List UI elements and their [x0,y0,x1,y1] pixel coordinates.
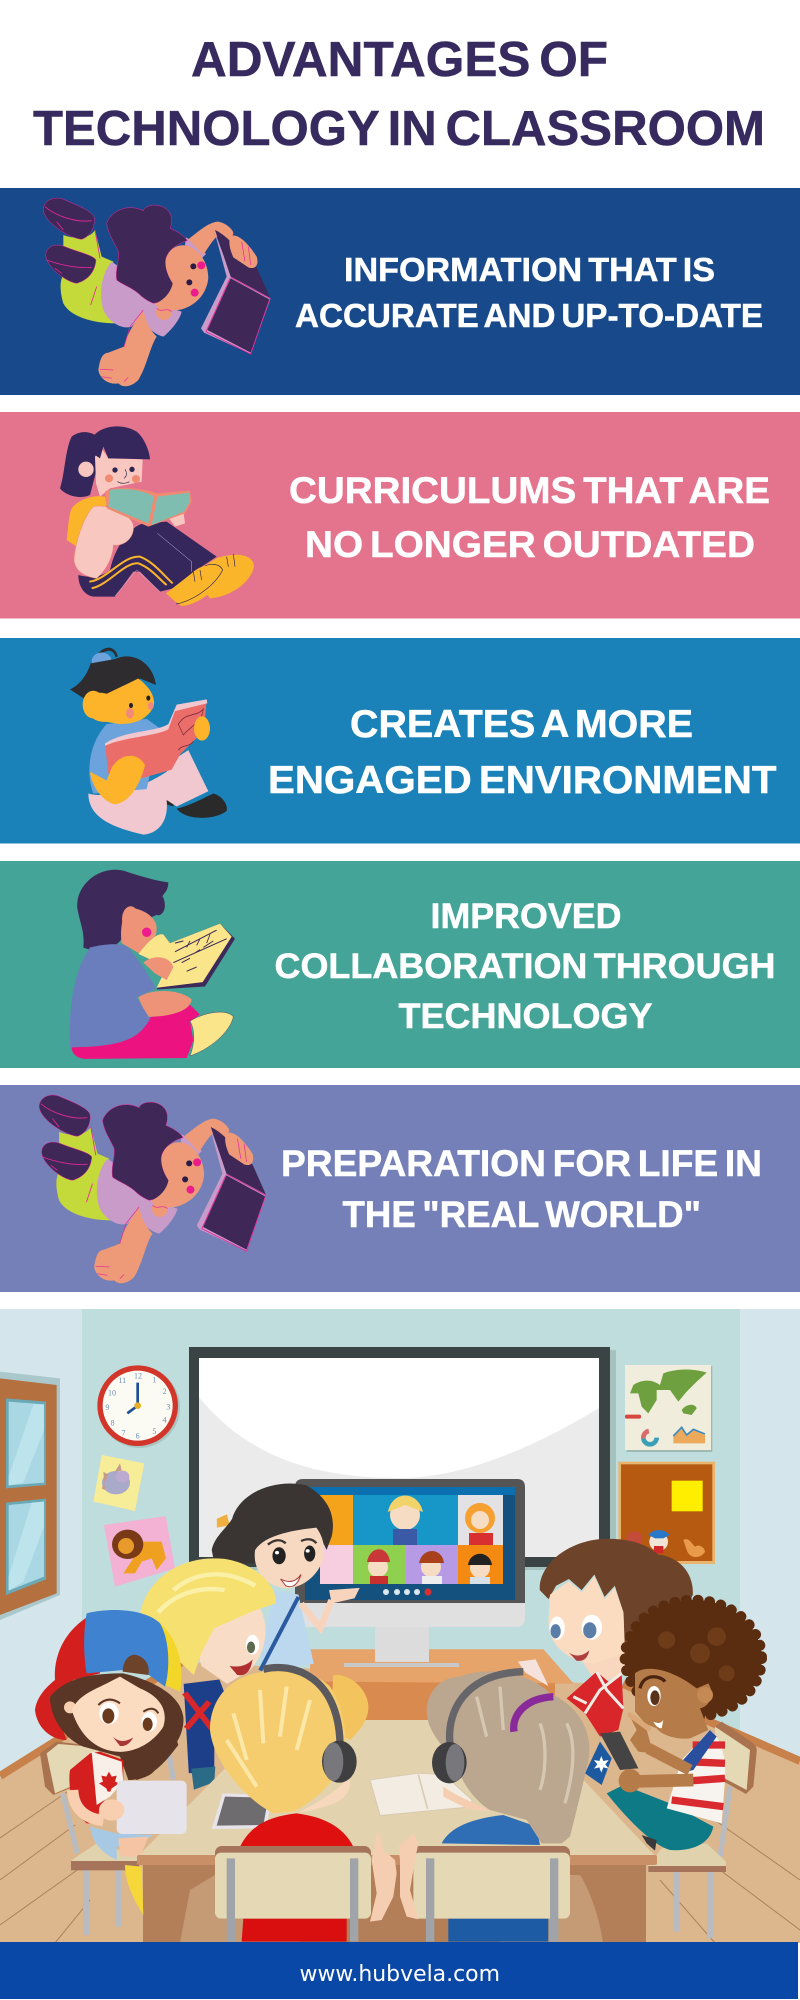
panel: curriculums [0,412,800,618]
clock: 11 [118,1376,126,1385]
tablet on table [212,1793,272,1829]
clock: 3 [166,1402,170,1411]
text: real world: PREPARATION FOR LIFE IN [281,1143,762,1184]
text: accurate information: ACCURATE AND UP-TO-DATE [295,298,763,335]
footer url: www.hubvela.com [300,1962,500,1987]
icon: child reading yellow book [70,870,235,1059]
clock: 9 [105,1403,109,1412]
clock: 12 [134,1372,142,1381]
window [0,1372,60,1620]
icon: child reading red book [70,649,227,835]
gray-haired child from behind [398,1671,589,1942]
girl with cap [35,1610,187,1915]
text: collaboration [274,896,776,1036]
poster: world map [625,1365,712,1452]
title [33,33,765,156]
icon: girl floating with book [43,198,271,386]
note: lion [104,1516,175,1587]
left chair [40,1742,173,1935]
icon: girl floating with book, repeat [39,1095,266,1283]
whiteboard [189,1347,616,1570]
open book [370,1773,472,1816]
panel: collaboration [0,861,800,1068]
teacher [212,1484,360,1671]
blonde boy [140,1558,276,1790]
meeting table [137,1720,657,1943]
text: collaboration: IMPROVED [430,896,622,936]
text: curriculums: NO LONGER OUTDATED [305,523,755,565]
right boy shirt [567,1672,623,1785]
panel: accurate information [0,188,800,395]
panel: engaged environment [0,638,800,844]
back desk [310,1649,573,1720]
title: ADVANTAGES OF [191,33,608,87]
clock: 8 [111,1418,115,1427]
text: engaged environment: CREATES A MORE [350,703,693,746]
blonde child from behind [210,1668,397,1942]
corkboard [618,1462,715,1564]
note: elephant [93,1455,144,1511]
text: engaged environment: ENGAGED ENVIRONMENT [268,759,777,802]
monitor [295,1479,525,1667]
clock [97,1365,180,1448]
text: engaged environment [268,703,777,802]
text: real world: THE "REAL WORLD" [342,1194,701,1235]
curly-haired boy [600,1600,762,1851]
clock: 1 [152,1376,156,1385]
clock: 4 [163,1416,167,1425]
text: accurate information [295,252,763,335]
footer bar [0,1942,798,1999]
clock: 7 [122,1428,126,1437]
clock: 5 [152,1427,156,1436]
classroom illustration [0,1309,800,1943]
text: collaboration: TECHNOLOGY [398,996,653,1036]
maple leaf [99,1772,119,1792]
panel: real world [0,1085,800,1292]
title: TECHNOLOGY IN CLASSROOM [33,102,765,156]
icon: girl reading teal book [60,426,254,606]
right chair [648,1722,757,1938]
clock: 10 [108,1388,116,1397]
text: collaboration: COLLABORATION THROUGH [274,946,776,986]
text: curriculums [289,469,770,565]
clock: 6 [136,1432,140,1441]
text: curriculums: CURRICULUMS THAT ARE [289,469,770,511]
text: real world [281,1143,762,1235]
clock: 2 [163,1387,167,1396]
right boy with brown hair [518,1539,693,1686]
text: accurate information: INFORMATION THAT IS [344,252,715,289]
